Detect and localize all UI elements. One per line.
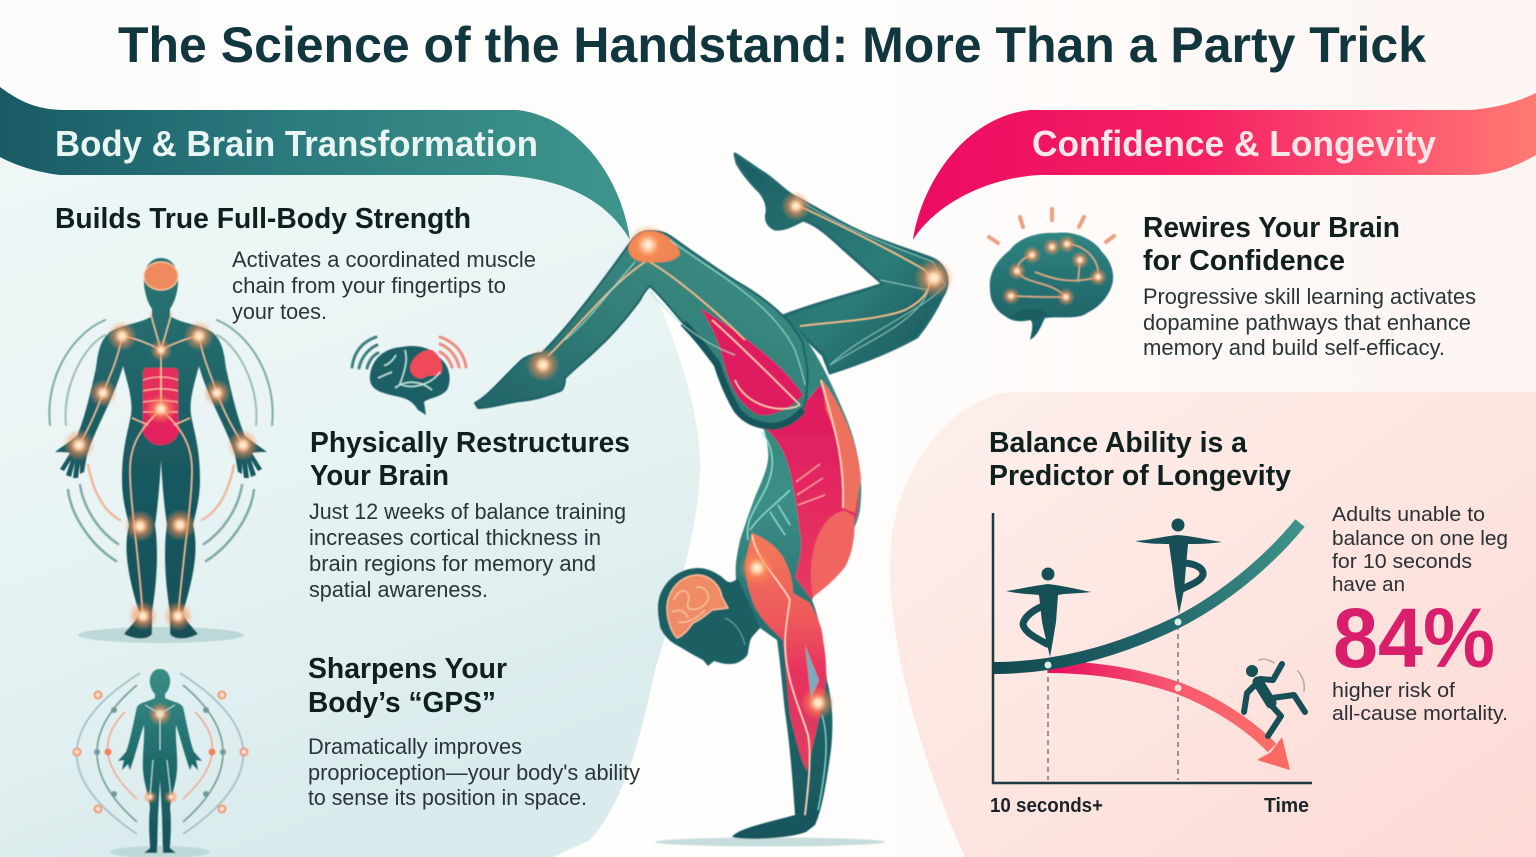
chart: balance versus time <box>990 513 1312 817</box>
text block: Rewires Your Brain for Confidence: Rewires Your Brain <box>1143 212 1400 244</box>
illustration: proprioception figure <box>74 669 248 857</box>
heading: Balance Ability: Balance Ability is a <box>989 427 1248 459</box>
heading: Balance Ability: Predictor of Longevity <box>989 460 1291 492</box>
text block: Physically Restructures Your Brain: Just 12 weeks of balance training <box>309 499 626 524</box>
balancing person, high <box>1135 518 1222 614</box>
text block: Rewires Your Brain for Confidence <box>1143 212 1476 360</box>
callout: 84% statistic <box>1332 503 1508 725</box>
icon: brain in the head <box>144 262 178 290</box>
torso muscles <box>765 380 861 600</box>
text block: Rewires Your Brain for Confidence: dopamine pathways that enhance <box>1143 310 1471 335</box>
text block: Builds True Full-Body Strength: chain from your fingertips to <box>232 273 506 298</box>
text block: Physically Restructures Your Brain: spatial awareness. <box>309 577 488 602</box>
illustration: full-body muscle chain figure <box>49 258 273 643</box>
text block: Physically Restructures Your Brain: increases cortical thickness in <box>309 525 601 550</box>
ribbon: Body & Brain Transformation <box>0 87 630 240</box>
front leg <box>475 231 808 426</box>
text block: Physically Restructures Your Brain <box>309 427 630 602</box>
text block: Builds True Full-Body Strength: Activates a coordinated muscle <box>232 247 536 272</box>
ribbon: Body & Brain Transformation: Body & Brain Transformation <box>55 123 538 164</box>
text block: Builds True Full-Body Strength: your toes. <box>232 299 327 324</box>
text block: Sharpens Your Body's GPS: Sharpens Your <box>308 653 507 685</box>
rear leg <box>735 154 947 373</box>
text block: Builds True Full-Body Strength: Builds True Full-Body Strength <box>55 203 471 235</box>
icon: brain with signal waves <box>352 337 466 415</box>
text block: Sharpens Your Body's GPS: Body’s “GPS” <box>308 687 496 719</box>
illustration: handstand figure <box>475 154 954 846</box>
torso and supporting arm <box>732 318 861 839</box>
text block: Rewires Your Brain for Confidence: for Confidence <box>1143 245 1345 277</box>
balancing person, low <box>1006 568 1091 657</box>
axis labels: 10 seconds+ <box>990 795 1103 817</box>
text block: Sharpens Your Body's GPS: to sense its position in space. <box>308 785 587 810</box>
text block: Sharpens Your Body's GPS <box>308 653 641 810</box>
head with brain <box>658 568 760 666</box>
axis labels <box>990 795 1309 817</box>
falling person <box>1244 659 1305 736</box>
text block: Sharpens Your Body's GPS: Dramatically improves <box>308 734 522 759</box>
text block: Physically Restructures Your Brain: Physically Restructures <box>310 427 630 459</box>
floor shadow <box>655 838 885 846</box>
callout: 84% statistic: balance on one leg <box>1332 527 1508 550</box>
axis labels: Time <box>1264 795 1309 817</box>
text block: Sharpens Your Body's GPS: proprioception—your body's ability <box>308 760 641 785</box>
panel: right pink background blob <box>890 392 1536 857</box>
heading: Balance Ability <box>989 427 1291 492</box>
callout: 84% statistic: all-cause mortality. <box>1332 702 1508 725</box>
callout: 84% statistic: 84% <box>1333 591 1495 685</box>
text block: Physically Restructures Your Brain: brain regions for memory and <box>309 551 596 576</box>
text block: Rewires Your Brain for Confidence: memory and build self-efficacy. <box>1143 335 1445 360</box>
decline curve <box>1048 667 1290 770</box>
callout: 84% statistic: Adults unable to <box>1332 503 1485 526</box>
text block: Rewires Your Brain for Confidence: Progressive skill learning activates <box>1143 284 1476 309</box>
callout: 84% statistic: for 10 seconds <box>1332 550 1472 573</box>
text block: Physically Restructures Your Brain: Your Brain <box>310 460 449 492</box>
panel: left background blob <box>0 150 700 857</box>
ribbon: Confidence & Longevity: Confidence & Longevity <box>1032 123 1436 164</box>
icon: glowing brain with rays <box>989 209 1114 340</box>
shoulder and arm muscles <box>745 533 826 815</box>
rising curve <box>993 523 1300 668</box>
ribbon: Confidence & Longevity <box>913 93 1536 240</box>
text block: Builds True Full-Body Strength <box>55 203 536 324</box>
lateral highlights <box>747 432 790 540</box>
core muscles <box>143 368 179 445</box>
joint glows <box>526 191 954 720</box>
title: The Science of the Handstand: More Than a Party Trick <box>118 17 1426 73</box>
callout: 84% statistic: have an <box>1332 573 1405 596</box>
callout: 84% statistic: higher risk of <box>1332 679 1455 702</box>
